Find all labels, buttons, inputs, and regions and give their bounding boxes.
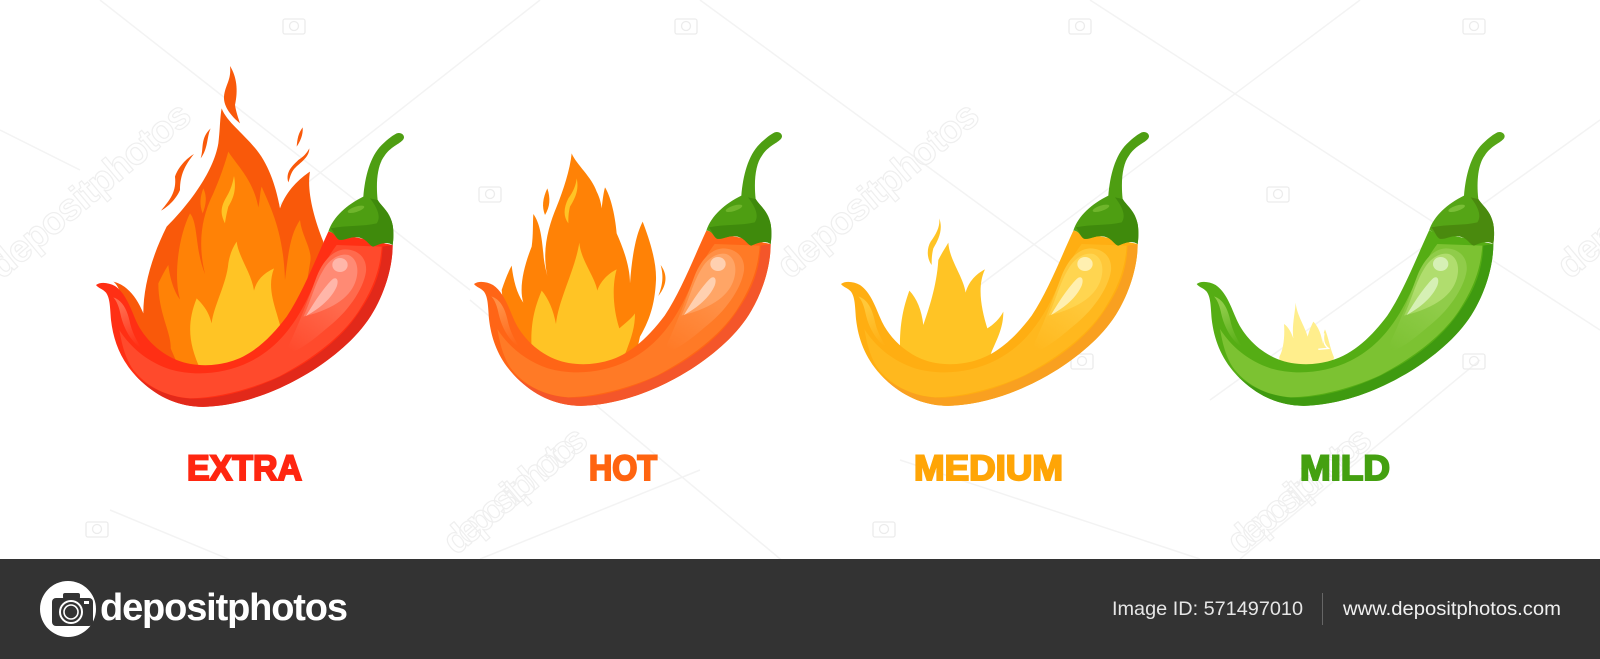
watermark pattern: depositphotos xyxy=(435,418,596,563)
flame: mild xyxy=(1279,303,1334,383)
mild chili with tiny flame xyxy=(1197,132,1505,406)
icon: camera logo xyxy=(40,581,96,637)
logo wordmark: depositphotos xyxy=(100,587,348,629)
flame: extra core xyxy=(190,242,283,383)
hot chili with flame xyxy=(474,132,782,406)
flame: extra small yellow wisp xyxy=(222,176,235,223)
red chili body xyxy=(96,133,404,407)
flame: extra middle xyxy=(158,152,311,383)
flame: medium wisp xyxy=(928,218,941,265)
flame: extra outer xyxy=(113,66,323,373)
medium chili with small flame xyxy=(841,132,1149,406)
watermark pattern: depositphotos xyxy=(1219,418,1380,563)
watermark pattern: depositphotos xyxy=(769,94,987,287)
flame: hot core xyxy=(531,243,635,383)
label: hot: HOT xyxy=(589,449,657,488)
site url: www.depositphotos.com xyxy=(1342,598,1561,620)
green chili body xyxy=(1197,132,1505,406)
flame: medium xyxy=(900,243,1003,383)
orange chili body xyxy=(474,132,782,406)
label: medium: MEDIUM xyxy=(914,449,1063,488)
label: extra: EXTRA xyxy=(187,449,302,488)
extra hot chili with large flame xyxy=(96,66,404,407)
flame: hot small yellow wisp xyxy=(565,178,577,223)
flame: hot wisps xyxy=(543,188,666,296)
yellow chili body xyxy=(841,132,1149,406)
flame: hot outer xyxy=(502,153,656,373)
footer bar xyxy=(0,559,1600,659)
label: mild: MILD xyxy=(1300,449,1390,488)
image id: Image ID: 571497010 xyxy=(1112,598,1303,620)
